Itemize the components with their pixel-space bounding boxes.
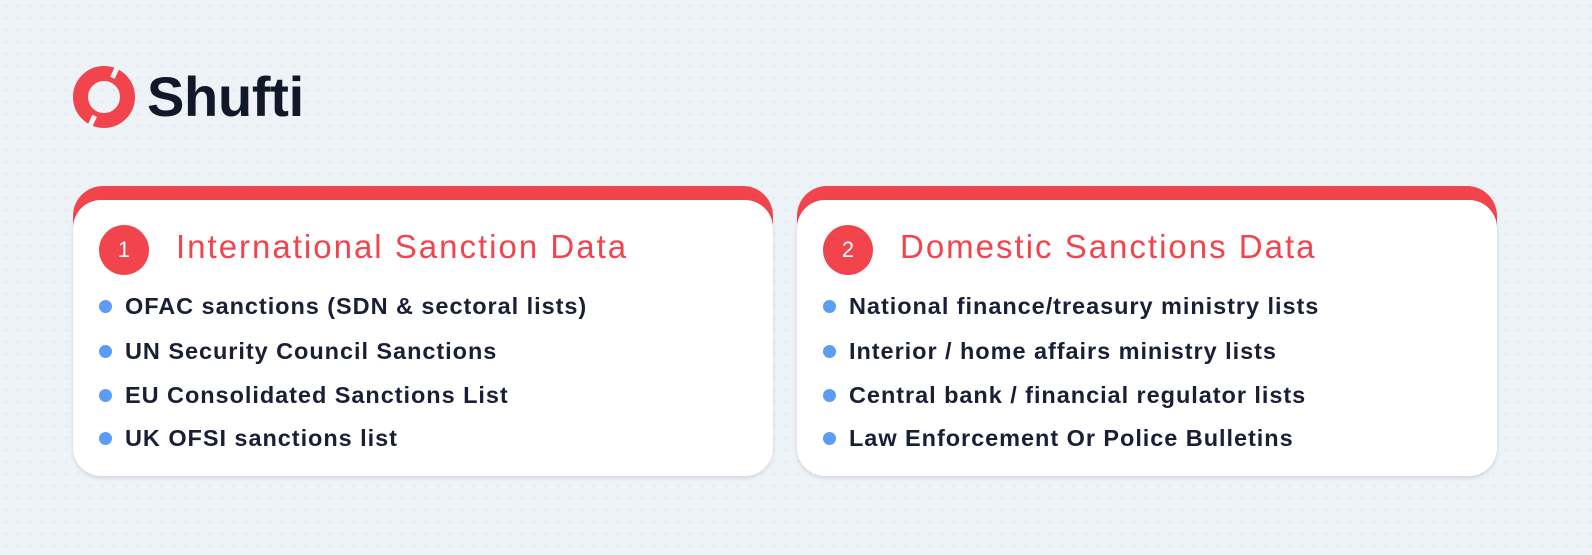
number badge 2: [823, 225, 873, 275]
list: [823, 293, 1319, 451]
list: Law Enforcement Or Police Bulletins: [849, 425, 1294, 451]
panel: domestic: [796, 186, 1498, 479]
number badge 1: 1: [118, 237, 130, 262]
heading: International Sanction Data: [176, 228, 628, 265]
number badge 2: 2: [842, 237, 854, 262]
logo: [73, 65, 304, 128]
panel: international: [72, 186, 774, 479]
list: Interior / home affairs ministry lists: [849, 338, 1277, 364]
heading: Domestic Sanctions Data: [900, 228, 1316, 265]
list: National finance/treasury ministry lists: [849, 293, 1319, 319]
icon: ring: [73, 66, 135, 128]
list: [99, 293, 587, 451]
number badge 1: [99, 225, 149, 275]
list: UN Security Council Sanctions: [125, 338, 497, 364]
list: Central bank / financial regulator lists: [849, 382, 1306, 408]
list: OFAC sanctions (SDN & sectoral lists): [125, 293, 587, 319]
list: EU Consolidated Sanctions List: [125, 382, 509, 408]
list: UK OFSI sanctions list: [125, 425, 398, 451]
logo text: Shufti: [147, 65, 304, 128]
